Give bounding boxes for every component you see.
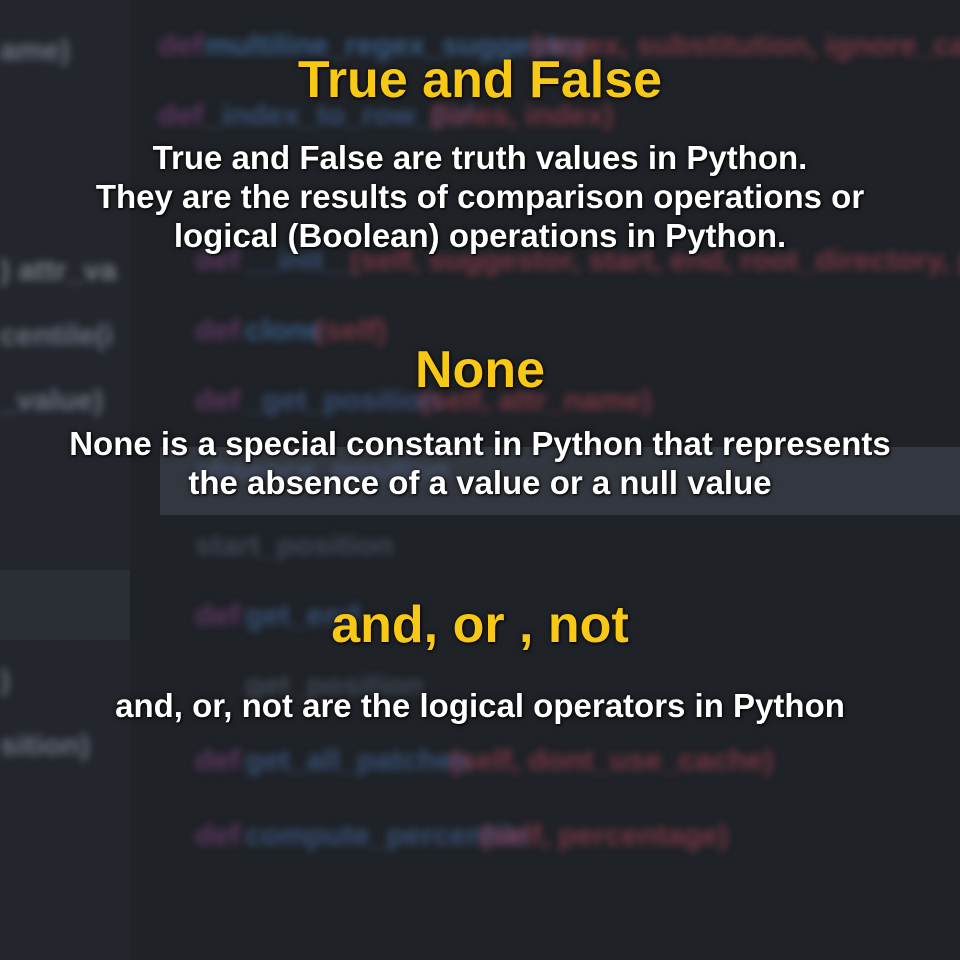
background: blurred code editor: def bbox=[195, 314, 241, 347]
background: blurred code editor: __init__ bbox=[244, 244, 357, 277]
title: None: None bbox=[415, 341, 545, 399]
background: blurred code editor: sition) bbox=[0, 729, 90, 762]
text: None description: None is a special constant in Python that represents bbox=[69, 425, 891, 462]
background: blurred code editor: centile(i bbox=[0, 319, 113, 352]
text: None description bbox=[69, 425, 892, 501]
text: logical operators description: and, or, not are the logical operators in Python bbox=[115, 687, 845, 724]
title: True and False: True and False bbox=[298, 51, 662, 109]
background: blurred code editor: (self, percentage) bbox=[480, 819, 728, 852]
text: True and False description: True and False are truth values in Python. bbox=[153, 139, 807, 176]
background: blurred code editor: def bbox=[195, 244, 241, 277]
text: True and False description: logical (Boolean) operations in Python. bbox=[174, 217, 786, 254]
background: blurred code editor: def bbox=[195, 599, 241, 632]
background: blurred code editor: ) attr_va bbox=[0, 254, 117, 287]
background: blurred code editor: def bbox=[195, 744, 241, 777]
background: blurred code editor: (self, dont_use_cache) bbox=[450, 744, 773, 777]
title: and, or, not: and, or , not bbox=[331, 596, 629, 654]
background: blurred code editor: (self) bbox=[315, 314, 387, 347]
background: blurred code editor: def bbox=[195, 819, 241, 852]
background: blurred code editor: ame) bbox=[0, 34, 70, 67]
background: blurred code editor: _get_position bbox=[244, 384, 440, 417]
background: blurred code editor: _index_to_row_col bbox=[204, 99, 475, 132]
background: blurred code editor: start_position bbox=[195, 529, 393, 562]
text: True and False description: They are the results of comparison operations or bbox=[96, 178, 864, 215]
background: blurred code editor: _value) bbox=[0, 384, 103, 417]
background: blurred code editor: get_position bbox=[245, 669, 423, 702]
background: blurred code editor: absence_position bbox=[195, 454, 448, 487]
background: blurred code editor: def bbox=[195, 384, 241, 417]
background: blurred code editor: multiline_regex_suggestor bbox=[205, 29, 587, 62]
background: blurred code editor: ) bbox=[0, 664, 10, 697]
background: blurred code editor: (lines, index) bbox=[430, 99, 613, 132]
background: blurred code editor: compute_percentile bbox=[245, 819, 528, 852]
background: blurred code editor: get_all_patches bbox=[245, 744, 470, 777]
background: blurred code editor: clone bbox=[245, 314, 323, 347]
background: blurred code editor: get_end bbox=[245, 599, 360, 632]
background: blurred code editor: def bbox=[158, 99, 204, 132]
background: blurred code editor: def bbox=[158, 29, 204, 62]
text: None description: the absence of a value or a null value bbox=[188, 464, 772, 501]
text: True and False description bbox=[96, 139, 866, 257]
background: blurred code editor: (self, attr_name) bbox=[420, 384, 652, 417]
